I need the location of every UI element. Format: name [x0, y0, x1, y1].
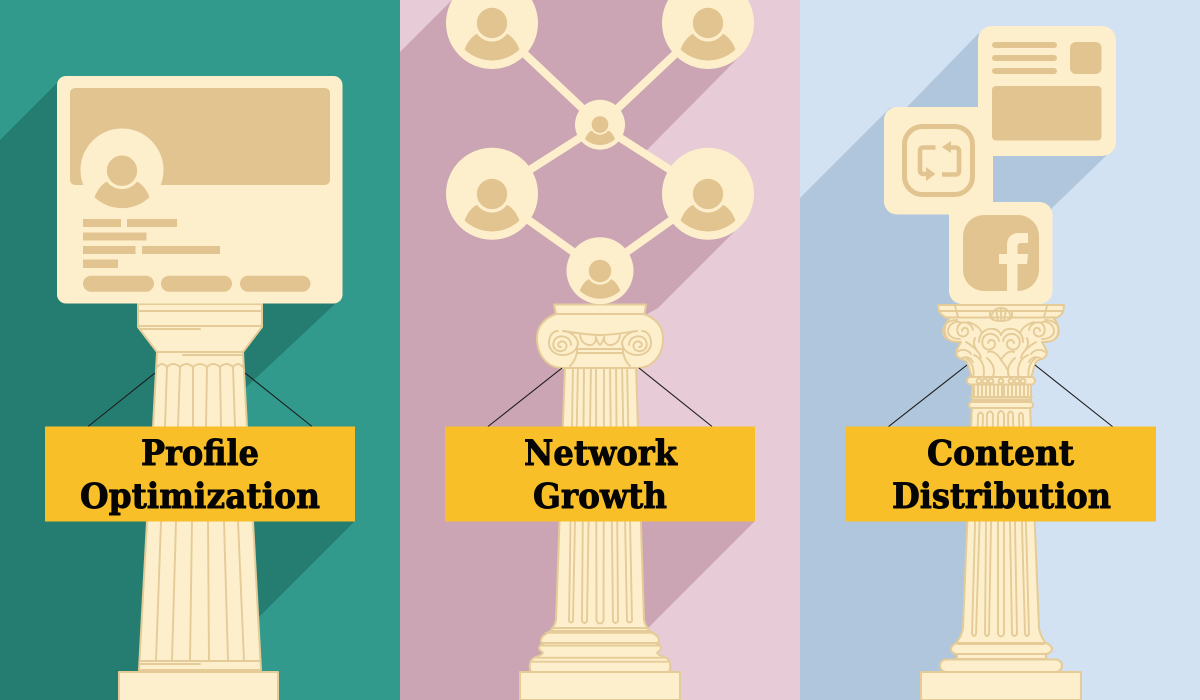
column shaft [139, 352, 261, 670]
column shaft [549, 366, 651, 633]
cover photo [70, 88, 330, 185]
sign: Profile Optimization [45, 426, 355, 522]
long shadow: network pillar [400, 0, 755, 700]
corinthian capital [938, 305, 1064, 408]
post text lines [992, 42, 1057, 74]
sign: Network Growth: Network [524, 433, 678, 474]
plinth [119, 672, 278, 700]
retweet card [884, 107, 993, 214]
node: middle right [662, 148, 754, 240]
connectors [492, 23, 708, 271]
column shaft [955, 405, 1047, 644]
facebook card [949, 202, 1052, 304]
panel: profile optimization background [0, 0, 400, 700]
sign: Content Distribution [846, 426, 1156, 522]
pillar: Doric column [119, 304, 278, 700]
node: bottom [566, 237, 634, 304]
sign: Network Growth [445, 426, 755, 522]
sign: Network Growth: Growth [533, 476, 667, 517]
post image [992, 86, 1102, 140]
hanging wires [88, 365, 1113, 427]
sign: Content Distribution: Distribution [892, 476, 1111, 517]
base mouldings [951, 643, 1052, 659]
profile text lines [83, 219, 220, 268]
node: top left [446, 0, 538, 69]
pillar: Ionic column [520, 304, 680, 700]
node: middle left [446, 148, 538, 240]
panel: network growth background [400, 0, 800, 700]
network diagram [446, 0, 754, 304]
sign: Content Distribution: Content [927, 433, 1074, 474]
sign: Profile Optimization: Profile [141, 433, 259, 474]
profile card [57, 76, 342, 304]
sign: Profile Optimization: Optimization [80, 476, 320, 517]
top content card [978, 26, 1116, 156]
base mouldings [530, 631, 670, 672]
profile buttons [83, 276, 310, 292]
capital [138, 304, 262, 352]
icon: facebook [963, 215, 1039, 291]
node: center [575, 100, 625, 150]
long shadow: profile pillar [0, 80, 355, 700]
pillar: Corinthian column [921, 305, 1081, 700]
plinth [921, 672, 1081, 700]
node: top right [662, 0, 754, 69]
post thumbnail [1070, 42, 1102, 74]
ionic capital [537, 314, 663, 368]
plinth [520, 672, 680, 700]
long shadow: content pillar [800, 33, 1107, 700]
icon: retweet [904, 126, 972, 194]
panel: content distribution background [800, 0, 1200, 700]
avatar [80, 128, 164, 215]
